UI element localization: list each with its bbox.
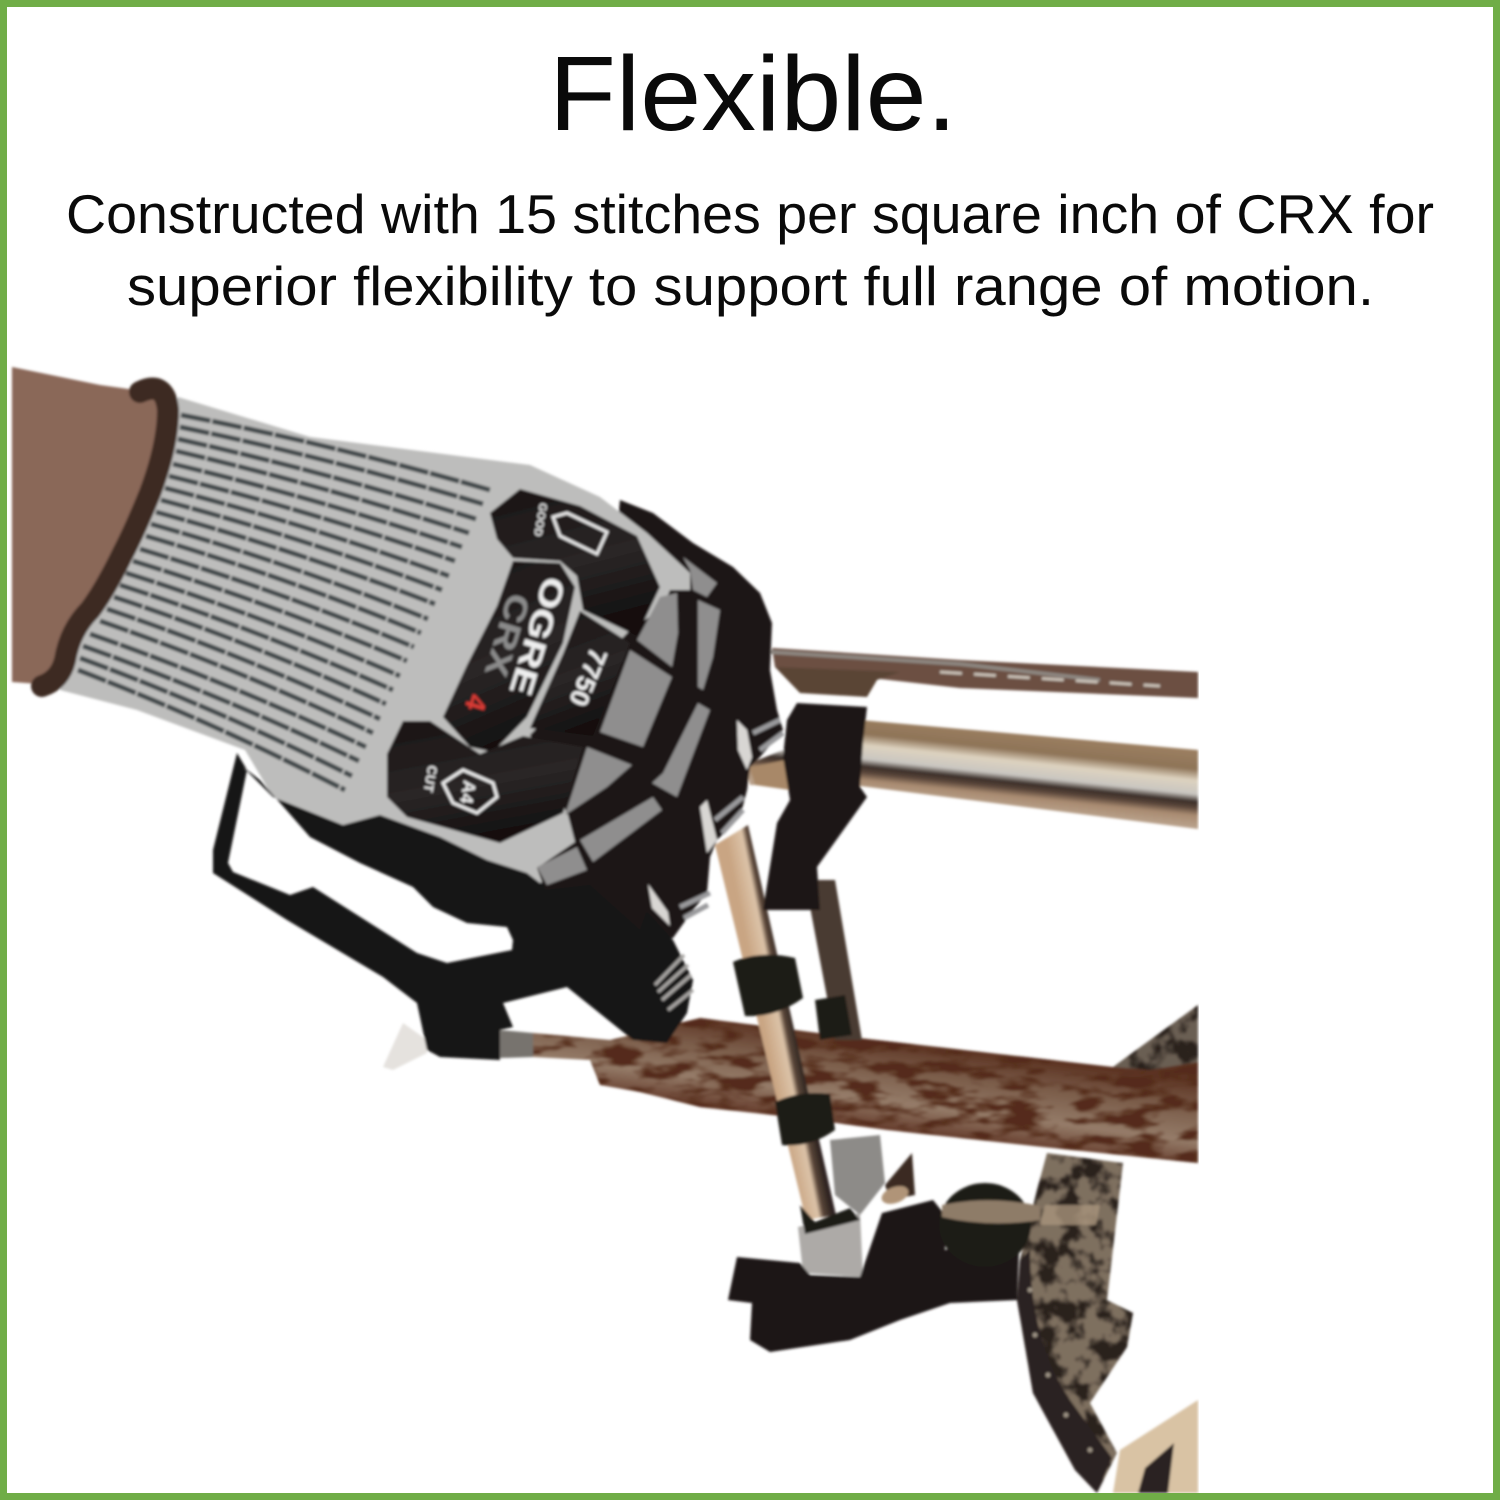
description text bbox=[66, 183, 1434, 317]
chrome tube bbox=[745, 720, 1198, 829]
cut rating plate bbox=[387, 721, 583, 843]
label: 7750: 7750 bbox=[563, 644, 613, 711]
arm bbox=[12, 367, 172, 684]
label: GOOD: GOOD bbox=[531, 502, 549, 537]
rusty horizontal bar bbox=[533, 1005, 1198, 1163]
black rings on rods bbox=[733, 955, 852, 1145]
finger tips bbox=[648, 720, 783, 926]
icon: A4 shield bbox=[443, 770, 497, 813]
photo: gloved hand gripping a rusty lever mechanism bbox=[12, 367, 1198, 1493]
upper protective plate bbox=[490, 489, 660, 636]
label: red 4: 4 bbox=[459, 691, 493, 715]
title: Flexible. bbox=[549, 35, 957, 153]
black palm, thumb, pistol grip lever and wire loop bbox=[213, 753, 693, 1060]
fingers dark mass bbox=[560, 500, 783, 940]
knit stripes bbox=[78, 415, 490, 790]
description text: superior flexibility to support full range of motion. bbox=[127, 255, 1374, 317]
label: A4: A4 bbox=[456, 779, 480, 805]
grip fitting and white shard bbox=[383, 1023, 533, 1070]
label: CUT: CUT bbox=[421, 764, 440, 793]
paper tag at bottom bbox=[1113, 1400, 1198, 1493]
toothed wheel segment bbox=[1017, 1153, 1133, 1493]
glove cuff bbox=[42, 389, 168, 686]
grey metal blocks bbox=[798, 1135, 915, 1277]
thumb tip stripes bbox=[655, 955, 693, 1010]
back-of-hand grey tiles bbox=[537, 557, 720, 885]
dark underlay behind back-of-hand tiles bbox=[530, 590, 720, 930]
vertical chrome rods bbox=[715, 760, 862, 1220]
icon: impact shield bbox=[553, 513, 607, 554]
label: CRX: CRX bbox=[478, 589, 537, 682]
glove knit body bbox=[60, 397, 690, 885]
black clamp base bbox=[728, 1200, 1020, 1352]
white mask: right side of photo crop bbox=[1199, 360, 1499, 1495]
OGRE CRX-4 plate bbox=[443, 561, 575, 752]
label: OGRE: OGRE bbox=[502, 573, 573, 700]
thin rusted rod bbox=[770, 648, 1198, 698]
model number plate bbox=[530, 611, 630, 736]
bolt bbox=[879, 1183, 911, 1207]
description text: Constructed with 15 stitches per square inch of CRX for bbox=[66, 183, 1434, 245]
adjustment nut bbox=[939, 1183, 1040, 1267]
black bracket on tube bbox=[763, 703, 867, 910]
